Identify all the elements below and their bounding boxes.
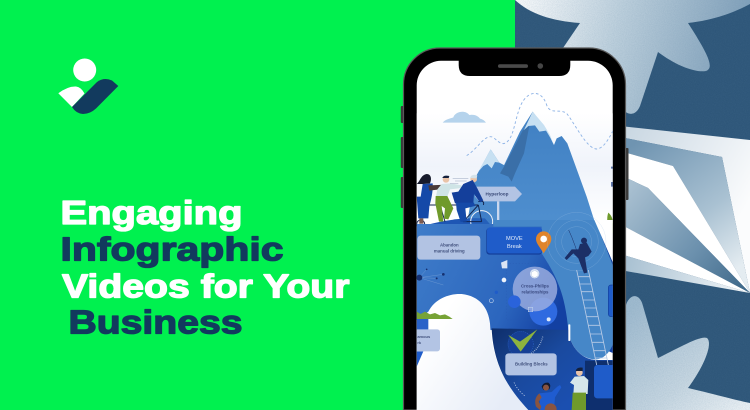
climber bbox=[565, 230, 592, 273]
cube icon bbox=[530, 269, 539, 278]
label: Building Blocks bbox=[505, 353, 557, 375]
burst rays bbox=[620, 126, 750, 293]
patterned right panel bbox=[515, 0, 750, 410]
navy right block bbox=[585, 361, 613, 410]
bottom flower shape bbox=[600, 296, 750, 410]
logo bbox=[58, 58, 118, 114]
large mountain bbox=[500, 112, 613, 280]
speaker bbox=[498, 64, 528, 68]
logo body bbox=[58, 86, 84, 107]
ladder bbox=[577, 270, 608, 365]
notch bbox=[459, 60, 570, 76]
leaf bbox=[607, 213, 614, 233]
grain texture bbox=[515, 0, 750, 410]
button: MOVE Break: Break bbox=[507, 244, 522, 250]
rear wheel bbox=[417, 220, 425, 228]
blue block bottom right bbox=[594, 365, 617, 398]
small mountain bbox=[468, 150, 504, 224]
logo head bbox=[73, 58, 96, 82]
right white wedge bbox=[594, 220, 613, 263]
sign: Hyperloop: Hyperloop bbox=[485, 191, 509, 196]
label: famous bbox=[416, 329, 440, 352]
check badge bbox=[508, 329, 543, 357]
phone bbox=[401, 48, 628, 410]
main blue field bbox=[417, 220, 613, 353]
small blue bubble bbox=[508, 295, 521, 308]
headline: Engaging bbox=[60, 195, 242, 232]
headline bbox=[60, 195, 350, 342]
rider one bbox=[416, 174, 441, 224]
tandem bike riders bbox=[416, 174, 522, 226]
sky haze bbox=[417, 113, 613, 223]
blue shard bbox=[417, 351, 423, 367]
bike frame bbox=[422, 201, 484, 222]
mountain snow bbox=[524, 112, 554, 145]
headline: Videos for Your bbox=[62, 268, 350, 306]
left blue block bbox=[417, 319, 428, 330]
location pin bbox=[536, 231, 551, 253]
camera bbox=[538, 63, 543, 69]
grass strip bbox=[417, 312, 453, 319]
bubble cluster bbox=[489, 260, 557, 326]
headline: Infographic bbox=[60, 232, 284, 268]
label: Abandon manual driving bbox=[417, 236, 480, 260]
main bubble: Cross-Philips relationships: relationships bbox=[522, 290, 549, 295]
dashed frame bbox=[507, 263, 548, 320]
bike wheel bbox=[470, 210, 494, 224]
phone side buttons bbox=[401, 106, 628, 208]
blue block right bbox=[608, 285, 618, 317]
button: MOVE Break bbox=[486, 227, 542, 255]
white blob bbox=[417, 294, 528, 410]
speed lines bbox=[450, 178, 468, 184]
small mountain snow bbox=[478, 149, 499, 172]
ground bbox=[430, 218, 490, 224]
woman seated bbox=[535, 383, 561, 410]
cloud bbox=[443, 112, 486, 123]
headline: Business bbox=[68, 304, 242, 342]
blue bubble bbox=[529, 298, 557, 326]
upper illustration bbox=[417, 93, 614, 280]
white highlight bbox=[568, 324, 570, 341]
dark lower panel bbox=[492, 328, 613, 410]
rider three bbox=[452, 175, 483, 222]
mountain shadow bbox=[500, 126, 529, 182]
main bubble: Cross-Philips relationships: Cross-Philips bbox=[521, 284, 550, 289]
man standing bbox=[570, 367, 588, 410]
green background panel bbox=[0, 0, 515, 410]
top flower shape bbox=[515, 0, 750, 114]
label: famous: rk bbox=[417, 340, 422, 345]
lower illustration bbox=[410, 212, 618, 410]
phone body bbox=[404, 48, 626, 410]
phone screen bbox=[410, 60, 618, 410]
label: Building Blocks: Building Blocks bbox=[515, 362, 548, 367]
network nodes bbox=[416, 268, 445, 285]
rider two bbox=[435, 176, 462, 222]
label: Abandon manual driving: Abandon bbox=[440, 242, 459, 247]
label: Abandon manual driving: manual driving bbox=[434, 248, 465, 253]
logo check bbox=[72, 79, 118, 114]
signal rings bbox=[547, 212, 606, 271]
dashed flight path bbox=[467, 93, 613, 156]
small nodes bbox=[502, 278, 506, 282]
button: MOVE Break: MOVE bbox=[506, 236, 523, 242]
main bubble: Cross-Philips relationships bbox=[513, 267, 557, 311]
dashed arc bbox=[514, 382, 525, 396]
right edge marks bbox=[611, 166, 613, 187]
label: famous: amous bbox=[417, 334, 431, 339]
signpost bbox=[497, 201, 500, 220]
mountain right lobe bbox=[493, 220, 613, 359]
document icon bbox=[501, 260, 507, 268]
